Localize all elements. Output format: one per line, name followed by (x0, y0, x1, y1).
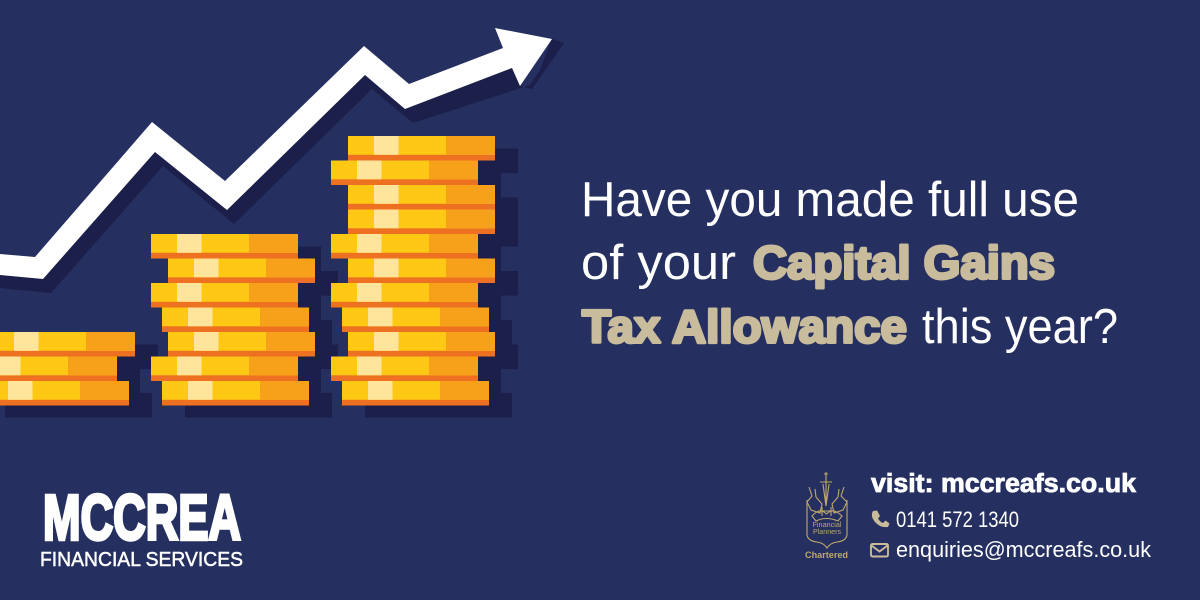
headline: this year? (922, 300, 1118, 354)
crest: Chartered Financial Planners: Chartered (805, 550, 848, 560)
logo: McCrea Financial Services: FINANCIAL SERVICES (40, 548, 243, 571)
coin stack: right (331, 136, 495, 406)
logo: McCrea Financial Services (40, 482, 243, 571)
arrow: rising trend line (0, 28, 564, 293)
headline: of your (581, 236, 736, 290)
crest: Chartered Financial Planners (805, 472, 848, 560)
icon: phone (872, 510, 890, 527)
coin stack: middle (151, 234, 315, 406)
headline (581, 173, 1118, 354)
headline: Have you made full use (581, 173, 1079, 227)
logo: McCrea Financial Services: MCCREA (43, 482, 241, 554)
contact: phone number: 0141 572 1340 (896, 507, 1019, 532)
contact: website: visit: mccreafs.co.uk (871, 470, 1137, 498)
crest: Chartered Financial Planners: Planners (813, 529, 841, 536)
headline: Tax Allowance (582, 300, 907, 352)
coin stack: left (0, 332, 135, 406)
coin shadows (0, 148, 518, 418)
crest: Chartered Financial Planners: Financial (812, 522, 842, 529)
icon: envelope (871, 544, 888, 556)
contact: email: enquiries@mccreafs.co.uk (896, 537, 1152, 562)
headline: Capital Gains (753, 236, 1055, 288)
